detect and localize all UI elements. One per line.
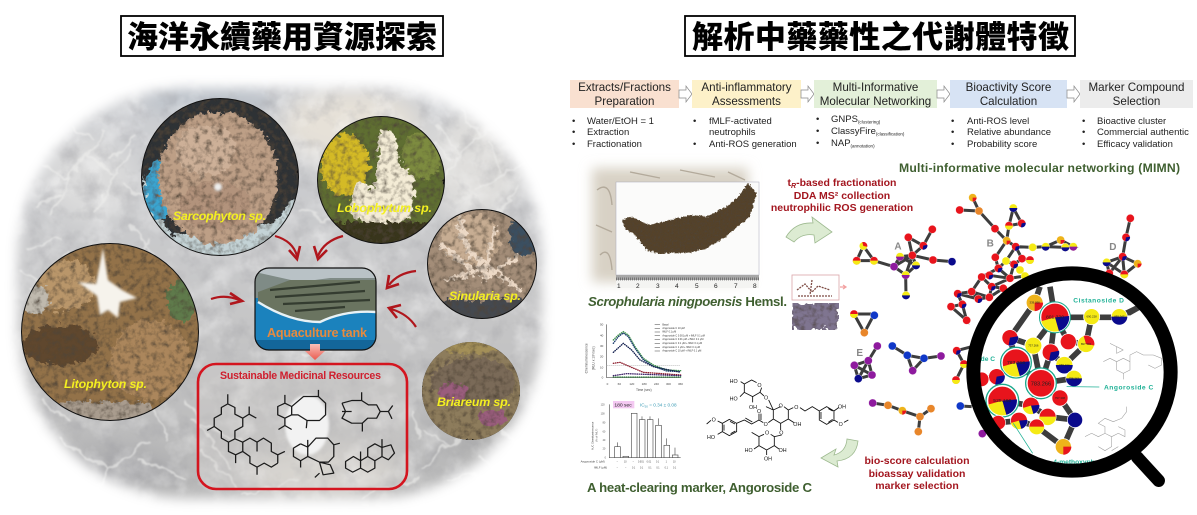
lens: node masses: 801.330 [1046, 315, 1064, 321]
workflow step 5: Marker Compound [1088, 81, 1185, 94]
label: heat-clearing marker: A heat-clearing marker, Angoroside C [587, 480, 812, 495]
chart: ROS bars at 180 sec: 60 [603, 431, 606, 433]
bullets 4: Relative abundance [967, 127, 1051, 138]
text: bio-score steps [864, 455, 970, 492]
cluster letter E: E [856, 348, 863, 359]
bullets 1: Extraction [587, 127, 629, 138]
arrow: green to network [786, 217, 832, 243]
chart: ROS bars at 180 sec: 40 [603, 440, 606, 442]
chart legend: fMLF 0.1 μM [662, 331, 676, 334]
label: Scrophularia: Scrophularia ningpoensis Hemsl. [588, 294, 787, 309]
heading: MIMN: Multi-informative molecular networking (MIMN) [899, 161, 1180, 175]
lens: node masses: 737.266 [1028, 344, 1039, 348]
chart legend: Basal [662, 324, 669, 327]
molecule: Angoroside C: OH [749, 405, 757, 411]
molecule: Angoroside C: O [764, 422, 768, 428]
arrow: step 2 to 3 [801, 86, 814, 102]
chart: ROS bars at 180 sec: 10 [624, 462, 627, 464]
panel: marine coral background [12, 82, 548, 506]
chart: ROS bars at 180 sec: – [617, 462, 619, 464]
bullets 5 [1082, 116, 1189, 150]
ruler: 3 [656, 283, 660, 290]
text: fractionation steps: DDA MS² collection [794, 190, 890, 202]
structure 4 [293, 438, 340, 477]
chart legend: Angoroside C 0.001 μM + fMLF 0.1 μM [662, 334, 705, 337]
workflow step 5: Selection [1113, 95, 1160, 108]
molecule: Angoroside C [707, 379, 848, 462]
chart legend: Angoroside C 1 μM + fMLF 0.1 μM [662, 346, 700, 349]
ruler: 4 [675, 283, 679, 290]
molecule: Angoroside C: HO [730, 379, 738, 385]
cluster letter A: A [894, 241, 902, 252]
chart legend: Angoroside C 10 μM + fMLF 0.1 μM [662, 350, 701, 353]
lens: reference structures [1085, 343, 1162, 451]
chart: chemiluminescence time course: 360 [678, 382, 683, 386]
molecule: Angoroside C: HO [707, 435, 715, 441]
arrow: from Sarcophyton [275, 236, 300, 259]
label: 180 sec: 180 sec [614, 402, 632, 408]
chart legend: Angoroside C 0.01 μM + fMLF 0.1 μM [662, 338, 703, 341]
magnifier ring [973, 273, 1171, 471]
chart: chemiluminescence time course: 60 [618, 382, 621, 386]
lens: node masses: 797.308 [1055, 396, 1066, 400]
panel: sustainable medicinal resources [198, 364, 407, 489]
lens: compound callouts: Angoroside C [1104, 384, 1153, 391]
chart legend: Angoroside C 0.1 μM + fMLF 0.1 μM [662, 342, 702, 345]
bullets 1: • [572, 139, 575, 150]
workflow step 4 [950, 80, 1067, 150]
lens: node masses: 525.160 [993, 398, 1012, 404]
lens: pie nodes [974, 294, 1127, 455]
label: Sarcophyton: Sarcophyton sp. [173, 209, 266, 223]
molecule: Angoroside C: O [779, 404, 783, 410]
bullets 2 [693, 116, 797, 150]
bullets 1: • [572, 127, 575, 138]
label: IC50: IC [640, 402, 645, 407]
bullets 3: (annotation) [851, 144, 875, 148]
bullets 4 [951, 116, 1051, 150]
title: marine resources: 海洋永續藥用資源探索 [127, 20, 437, 55]
chart: ROS bars at 180 sec: 0.1 [648, 468, 652, 470]
network: molecular clusters A B D [853, 194, 1142, 324]
lens: compound callouts: 4-methoxyph [1053, 459, 1095, 466]
chart: ROS bars at 180 sec: – [625, 468, 627, 470]
chart: ROS bars at 180 sec: 1 [666, 462, 668, 464]
chart: ROS bars at 180 sec: – [633, 462, 635, 464]
lens: node masses: 855.247 [1114, 315, 1125, 319]
chart: ROS bars at 180 sec: 0.1 [656, 462, 660, 464]
lens: node masses [993, 301, 1125, 404]
workflow step 2: Assessments [712, 95, 781, 108]
ruler [616, 275, 759, 290]
structure 5 [346, 439, 394, 472]
ruler: 7 [734, 283, 738, 290]
text: fractionation steps: R [791, 183, 796, 190]
bullets 4: • [951, 127, 954, 138]
chart: ROS bars at 180 sec: 0 [605, 458, 607, 460]
chart: chemiluminescence time course: 300 [666, 382, 671, 386]
chart: ROS bars at 180 sec: AUC Chemiluminescence [592, 421, 595, 450]
workflow step 1 [570, 80, 679, 150]
structure 1 [207, 394, 285, 475]
label: IC50: = 0.34 ± 0.08 [648, 402, 677, 407]
arrow: from Briareum [389, 305, 416, 327]
arrow: from Lobophytum [314, 236, 343, 259]
molecule: Angoroside C: OH [779, 448, 787, 454]
label: Litophyton: Litophyton sp. [64, 377, 147, 391]
bullets 5: Bioactive cluster [1097, 116, 1166, 127]
bullets 3: • [816, 138, 819, 149]
ruler: 6 [714, 283, 718, 290]
chart: chemiluminescence time course: 40 [600, 333, 604, 337]
chart: ROS bars at 180 sec: 0.1 [673, 468, 677, 470]
bullets 1 [572, 116, 654, 150]
label: Lobophytum: Lobophytum sp. [337, 201, 432, 215]
photo: Scrophularia root [592, 168, 759, 290]
bullets 4: Probability score [967, 139, 1037, 150]
chart: ROS bars at 180 sec: 10 [673, 462, 676, 464]
lens: node masses: 897.302 [1081, 342, 1092, 346]
photo: Lobophytum [316, 115, 446, 246]
arrow: step 4 to 5 [1067, 86, 1080, 102]
magnifier handle [1137, 457, 1159, 481]
workflow step 2 [692, 80, 801, 150]
workflow step 5 [1080, 80, 1193, 150]
cluster letter D: D [1109, 242, 1117, 253]
bullets 3: (classification) [876, 132, 905, 136]
lens: thick edges [982, 287, 1140, 447]
title: metabolomic features: 解析中藥藥性之代謝體特徵 [692, 20, 1069, 55]
chart: chemiluminescence time course: Chemiluminescence [584, 343, 588, 373]
lens: compound callouts [981, 298, 1153, 466]
bullets 5: • [1082, 127, 1085, 138]
lens: compound callouts: de C [981, 356, 995, 363]
bullets 4: Anti-ROS level [967, 116, 1029, 127]
text: fractionation steps: t [788, 177, 791, 189]
molecule: Angoroside C: O [794, 405, 798, 411]
chart legend: Angoroside C 10 μM [662, 327, 685, 330]
photo: Sarcophyton [140, 95, 300, 262]
workflow step 1: Preparation [595, 95, 654, 108]
bullets 3 [816, 114, 905, 149]
bullets 3: (clustering) [858, 120, 881, 124]
lens: node masses: 783.266 [1031, 381, 1051, 387]
bullets 1: Water/EtOH = 1 [587, 116, 654, 127]
arrow: from Litophyton [211, 293, 242, 304]
chart: ROS bars at 180 sec: 0.1 [665, 468, 669, 470]
chart: ROS bars at 180 sec: (% of fMLF) [595, 429, 598, 442]
molecule: Angoroside C: O [712, 418, 716, 424]
bullets 2: neutrophils [709, 127, 756, 138]
chart: ROS bars at 180 sec: 0.1 [656, 468, 660, 470]
bullets 5: • [1082, 116, 1085, 127]
bullets 5: Efficacy validation [1097, 139, 1173, 150]
text: bio-score steps: bioassay validation [869, 468, 965, 480]
lens: compound callouts: Cistanoside D [1073, 298, 1124, 305]
photo: aquaculture tank [255, 268, 376, 350]
ruler: 5 [695, 283, 699, 290]
molecule: Angoroside C: O [764, 396, 768, 402]
lens: node masses: 690.228 [1087, 315, 1097, 319]
chart: chemiluminescence time course: (RLU x 10⁵/sec) [592, 346, 596, 370]
molecule: Angoroside C: O [839, 422, 843, 428]
label: Sinularia: Sinularia sp. [449, 289, 521, 303]
chart: chemiluminescence time course: 0 [602, 376, 604, 380]
chart: ROS bars at 180 sec: 120 [601, 405, 605, 407]
bullets 2: • [693, 116, 696, 127]
chart: chemiluminescence time course: 50 [600, 323, 604, 327]
bullets 2: Anti-ROS generation [709, 139, 797, 150]
bullets 3: ClassyFire [831, 126, 876, 137]
bullets 3: GNPS [831, 114, 858, 125]
chart: ROS bars at 180 sec [581, 401, 681, 470]
chart: ROS bars at 180 sec: 0.01 [647, 462, 652, 464]
thumbnail: network and data table [792, 275, 839, 330]
arrow: green to marker [821, 439, 858, 467]
ruler: 1 [617, 283, 621, 290]
lens: node masses: 735.242 [1069, 376, 1080, 380]
chart: chemiluminescence time course: 0 [607, 382, 609, 386]
chart: chemiluminescence time course: 10 [600, 365, 604, 369]
workflow step 2: Anti-inflammatory [701, 81, 792, 94]
chart: ROS bars at 180 sec: Angoroside C (μM) [581, 460, 605, 464]
ruler: 2 [636, 283, 640, 290]
chart: chemiluminescence time course: 120 [629, 382, 635, 386]
lens: node masses: 665.242 [1059, 363, 1070, 367]
molecule: Angoroside C: O [765, 430, 769, 436]
chart: ROS bars at 180 sec: 0.001 [638, 462, 645, 464]
chart: ROS bars at 180 sec: fMLF (μM) [594, 466, 607, 470]
chart: chemiluminescence time course: 30 [600, 344, 604, 348]
photo: Briareum [421, 336, 521, 441]
molecule: Angoroside C: O [757, 409, 761, 415]
chart: chemiluminescence time course [584, 323, 705, 392]
photo: Litophyton [20, 242, 200, 426]
workflow step 3: Molecular Networking [820, 95, 931, 108]
chemical structures [207, 390, 394, 477]
bullets 3: • [816, 126, 819, 137]
chart: ROS bars at 180 sec: – [617, 468, 619, 470]
workflow step 3 [814, 80, 937, 149]
text: bio-score steps: bio-score calculation [864, 455, 970, 467]
bullets 2: • [693, 139, 696, 150]
arrow: step 3 to 4 [937, 86, 950, 102]
molecule: Angoroside C: O [779, 430, 783, 436]
chart: chemiluminescence time course: 240 [654, 382, 659, 386]
chart: ROS bars at 180 sec: 0.1 [640, 468, 644, 470]
molecule: Angoroside C: HO [730, 396, 738, 402]
label: Briareum: Briareum sp. [437, 395, 511, 409]
heading: resources: Sustainable Medicinal Resources [220, 370, 381, 382]
chart: chemiluminescence time course: Time (sec) [636, 388, 652, 392]
molecule: Angoroside C: O [757, 383, 761, 389]
text: fractionation steps [771, 177, 913, 214]
label: IC50: 50 [645, 404, 648, 408]
bullets 2: fMLF-activated [709, 116, 772, 127]
molecule: Angoroside C: OH [764, 456, 772, 462]
workflow step 4: Bioactivity Score [966, 81, 1051, 94]
network: molecular clusters E and small [850, 310, 990, 438]
chart: ROS bars at 180 sec: 80 [603, 422, 606, 424]
bullets 3: NAP [831, 138, 851, 149]
chart: ROS bars at 180 sec: 0.1 [632, 468, 636, 470]
bullets 4: • [951, 116, 954, 127]
bullets 3: • [816, 114, 819, 125]
workflow step 1: Extracts/Fractions [578, 81, 671, 94]
molecule: Angoroside C: OH [838, 405, 846, 411]
arrow: step 1 to 2 [679, 86, 692, 102]
arrow: thumbnail pink [840, 285, 846, 289]
molecule: Angoroside C: HO [745, 448, 753, 454]
text: bio-score steps: marker selection [875, 480, 959, 492]
label: tank: Aquaculture tank [267, 326, 368, 340]
workflow step 4: Calculation [980, 95, 1037, 108]
text: fractionation steps: neutrophilic ROS generation [771, 202, 913, 214]
structure 3 [342, 392, 393, 431]
lens: node masses: 783.266 [1007, 360, 1025, 366]
bullets 4: • [951, 139, 954, 150]
chart: ROS bars at 180 sec: 100 [601, 413, 605, 415]
bullets 5: • [1082, 139, 1085, 150]
chart legend [655, 324, 705, 353]
chart: chemiluminescence time course: 180 [642, 382, 647, 386]
magnifier lens with enlarged network [973, 273, 1171, 481]
chart: ROS bars at 180 sec: 20 [603, 449, 606, 451]
text: fractionation steps: -based fractionation [796, 177, 896, 189]
arrow: from Sinularia [387, 271, 416, 288]
cluster letter B: B [987, 239, 994, 250]
bullets 1: Fractionation [587, 139, 642, 150]
ruler: 8 [753, 283, 757, 290]
workflow step 3: Multi-Informative [833, 81, 918, 94]
molecule: Angoroside C: OH [793, 422, 801, 428]
structure 2 [278, 390, 326, 429]
bullets 5: Commercial authentic [1097, 127, 1189, 138]
chart: chemiluminescence time course: 20 [600, 355, 604, 359]
arrow: pink down [305, 344, 325, 360]
bullets 1: • [572, 116, 575, 127]
lens: node masses: 339.098 [1030, 301, 1040, 305]
photo: Sinularia [427, 209, 537, 319]
